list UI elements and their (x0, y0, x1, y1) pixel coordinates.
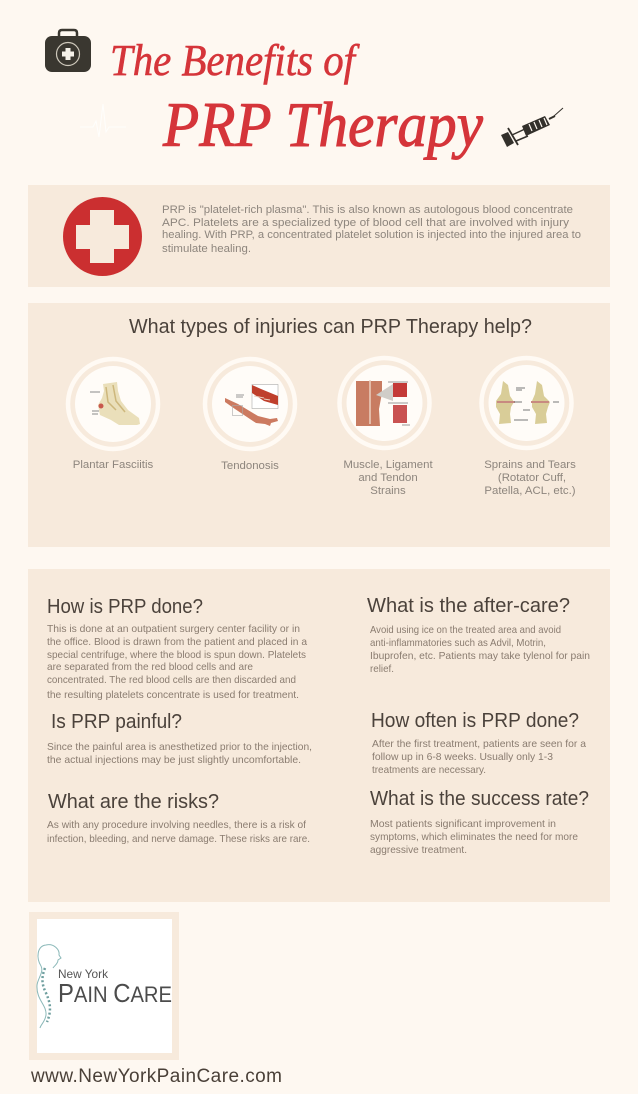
section: risks: infection, bleeding, and nerve damage. These risks are rare. (47, 834, 310, 845)
section: after-care: Ibuprofen, etc. Patients may take tylenol for pain (370, 651, 590, 662)
section: how is PRP done: the office. Blood is drawn from the patient and placed in a (47, 637, 307, 648)
section: how is PRP done: the resulting platelets concentrate is used for treatment. (47, 690, 299, 701)
item: muscle strains: and Tendon (358, 472, 418, 484)
section: after-care: What is the after-care? (367, 595, 570, 617)
section: risks: What are the risks? (48, 791, 219, 813)
section: after-care: relief. (370, 664, 394, 675)
item: muscle strains: Strains (370, 485, 406, 497)
item: plantar fasciitis: Plantar Fasciitis (73, 459, 153, 471)
logo: New York Pain Care (29, 912, 179, 1060)
section: after-care: Avoid using ice on the treated area and avoid (370, 625, 561, 636)
item: muscle strains (340, 358, 433, 497)
section: how is PRP done: special centrifuge, where the blood is spun down. Platelets (47, 650, 306, 661)
icon: red cross (63, 197, 142, 276)
section: how often: After the first treatment, patients are seen for a (372, 739, 586, 750)
icon: heartbeat line (80, 104, 126, 137)
section: how often: treatments are necessary. (372, 765, 486, 776)
text: PRP definition: APC. Platelets are a specialized type of blood cell that are involved with injury (162, 217, 570, 229)
icon: medical bag (45, 30, 91, 72)
logo: New York Pain Care: New York (58, 967, 109, 981)
title (110, 36, 484, 160)
section: is PRP painful (47, 711, 312, 766)
section: how often: How often is PRP done? (371, 710, 579, 732)
item: sprains and tears: Sprains and Tears (484, 459, 576, 471)
text: PRP definition: PRP is "platelet-rich plasma". This is also known as autologous blood concentrate (162, 204, 573, 216)
section: how is PRP done: How is PRP done? (47, 596, 203, 618)
icon: syringe (501, 108, 563, 147)
title: PRP Therapy (162, 89, 484, 160)
item: tendonosis: Tendonosis (221, 460, 279, 472)
section: how often (371, 710, 586, 776)
section: risks (47, 791, 310, 845)
section: is PRP painful: Since the painful area is anesthetized prior to the injection, (47, 742, 312, 753)
section: how is PRP done (47, 596, 307, 701)
panel: injury types (28, 303, 610, 547)
text: PRP definition (162, 204, 581, 255)
section: how is PRP done: are separated from the red blood cells and are (47, 662, 253, 673)
section: how is PRP done: concentrated. The red blood cells are then discarded and (47, 675, 296, 686)
item: sprains and tears: Patella, ACL, etc.) (484, 485, 576, 497)
title: The Benefits of (110, 36, 360, 85)
panel: PRP questions (28, 569, 610, 902)
section: is PRP painful: Is PRP painful? (51, 711, 182, 733)
section: how often: follow up in 6-8 weeks. Usually only 1-3 (372, 752, 553, 763)
item: sprains and tears: (Rotator Cuff, (498, 472, 566, 484)
website url: www.NewYorkPainCare.com (30, 1066, 282, 1087)
section: after-care: anti-inflammatories such as Advil, Motrin, (370, 638, 546, 649)
item: tendonosis (205, 359, 295, 472)
section: success rate (370, 788, 589, 856)
section: success rate: aggressive treatment. (370, 845, 467, 856)
section: how is PRP done: This is done at an outpatient surgery center facility or in (47, 624, 300, 635)
panel: what is PRP (28, 185, 610, 287)
item: muscle strains: Muscle, Ligament (343, 459, 433, 471)
section: success rate: symptoms, which eliminates the need for more (370, 832, 578, 843)
item: sprains and tears (482, 358, 576, 497)
item: plantar fasciitis (68, 359, 158, 471)
section: is PRP painful: the actual injections may be just slightly uncomfortable. (47, 755, 301, 766)
text: PRP definition: healing. With PRP, a concentrated platelet solution is injected into the injured area to (162, 229, 581, 241)
section: success rate: Most patients significant improvement in (370, 819, 556, 830)
section: success rate: What is the success rate? (370, 788, 589, 810)
heading: injury types: What types of injuries can PRP Therapy help? (129, 316, 532, 338)
section: after-care (367, 595, 590, 675)
text: PRP definition: stimulate healing. (162, 243, 251, 255)
logo: New York Pain Care: PAIN CARE (58, 978, 172, 1008)
section: risks: As with any procedure involving needles, there is a risk of (47, 820, 306, 831)
